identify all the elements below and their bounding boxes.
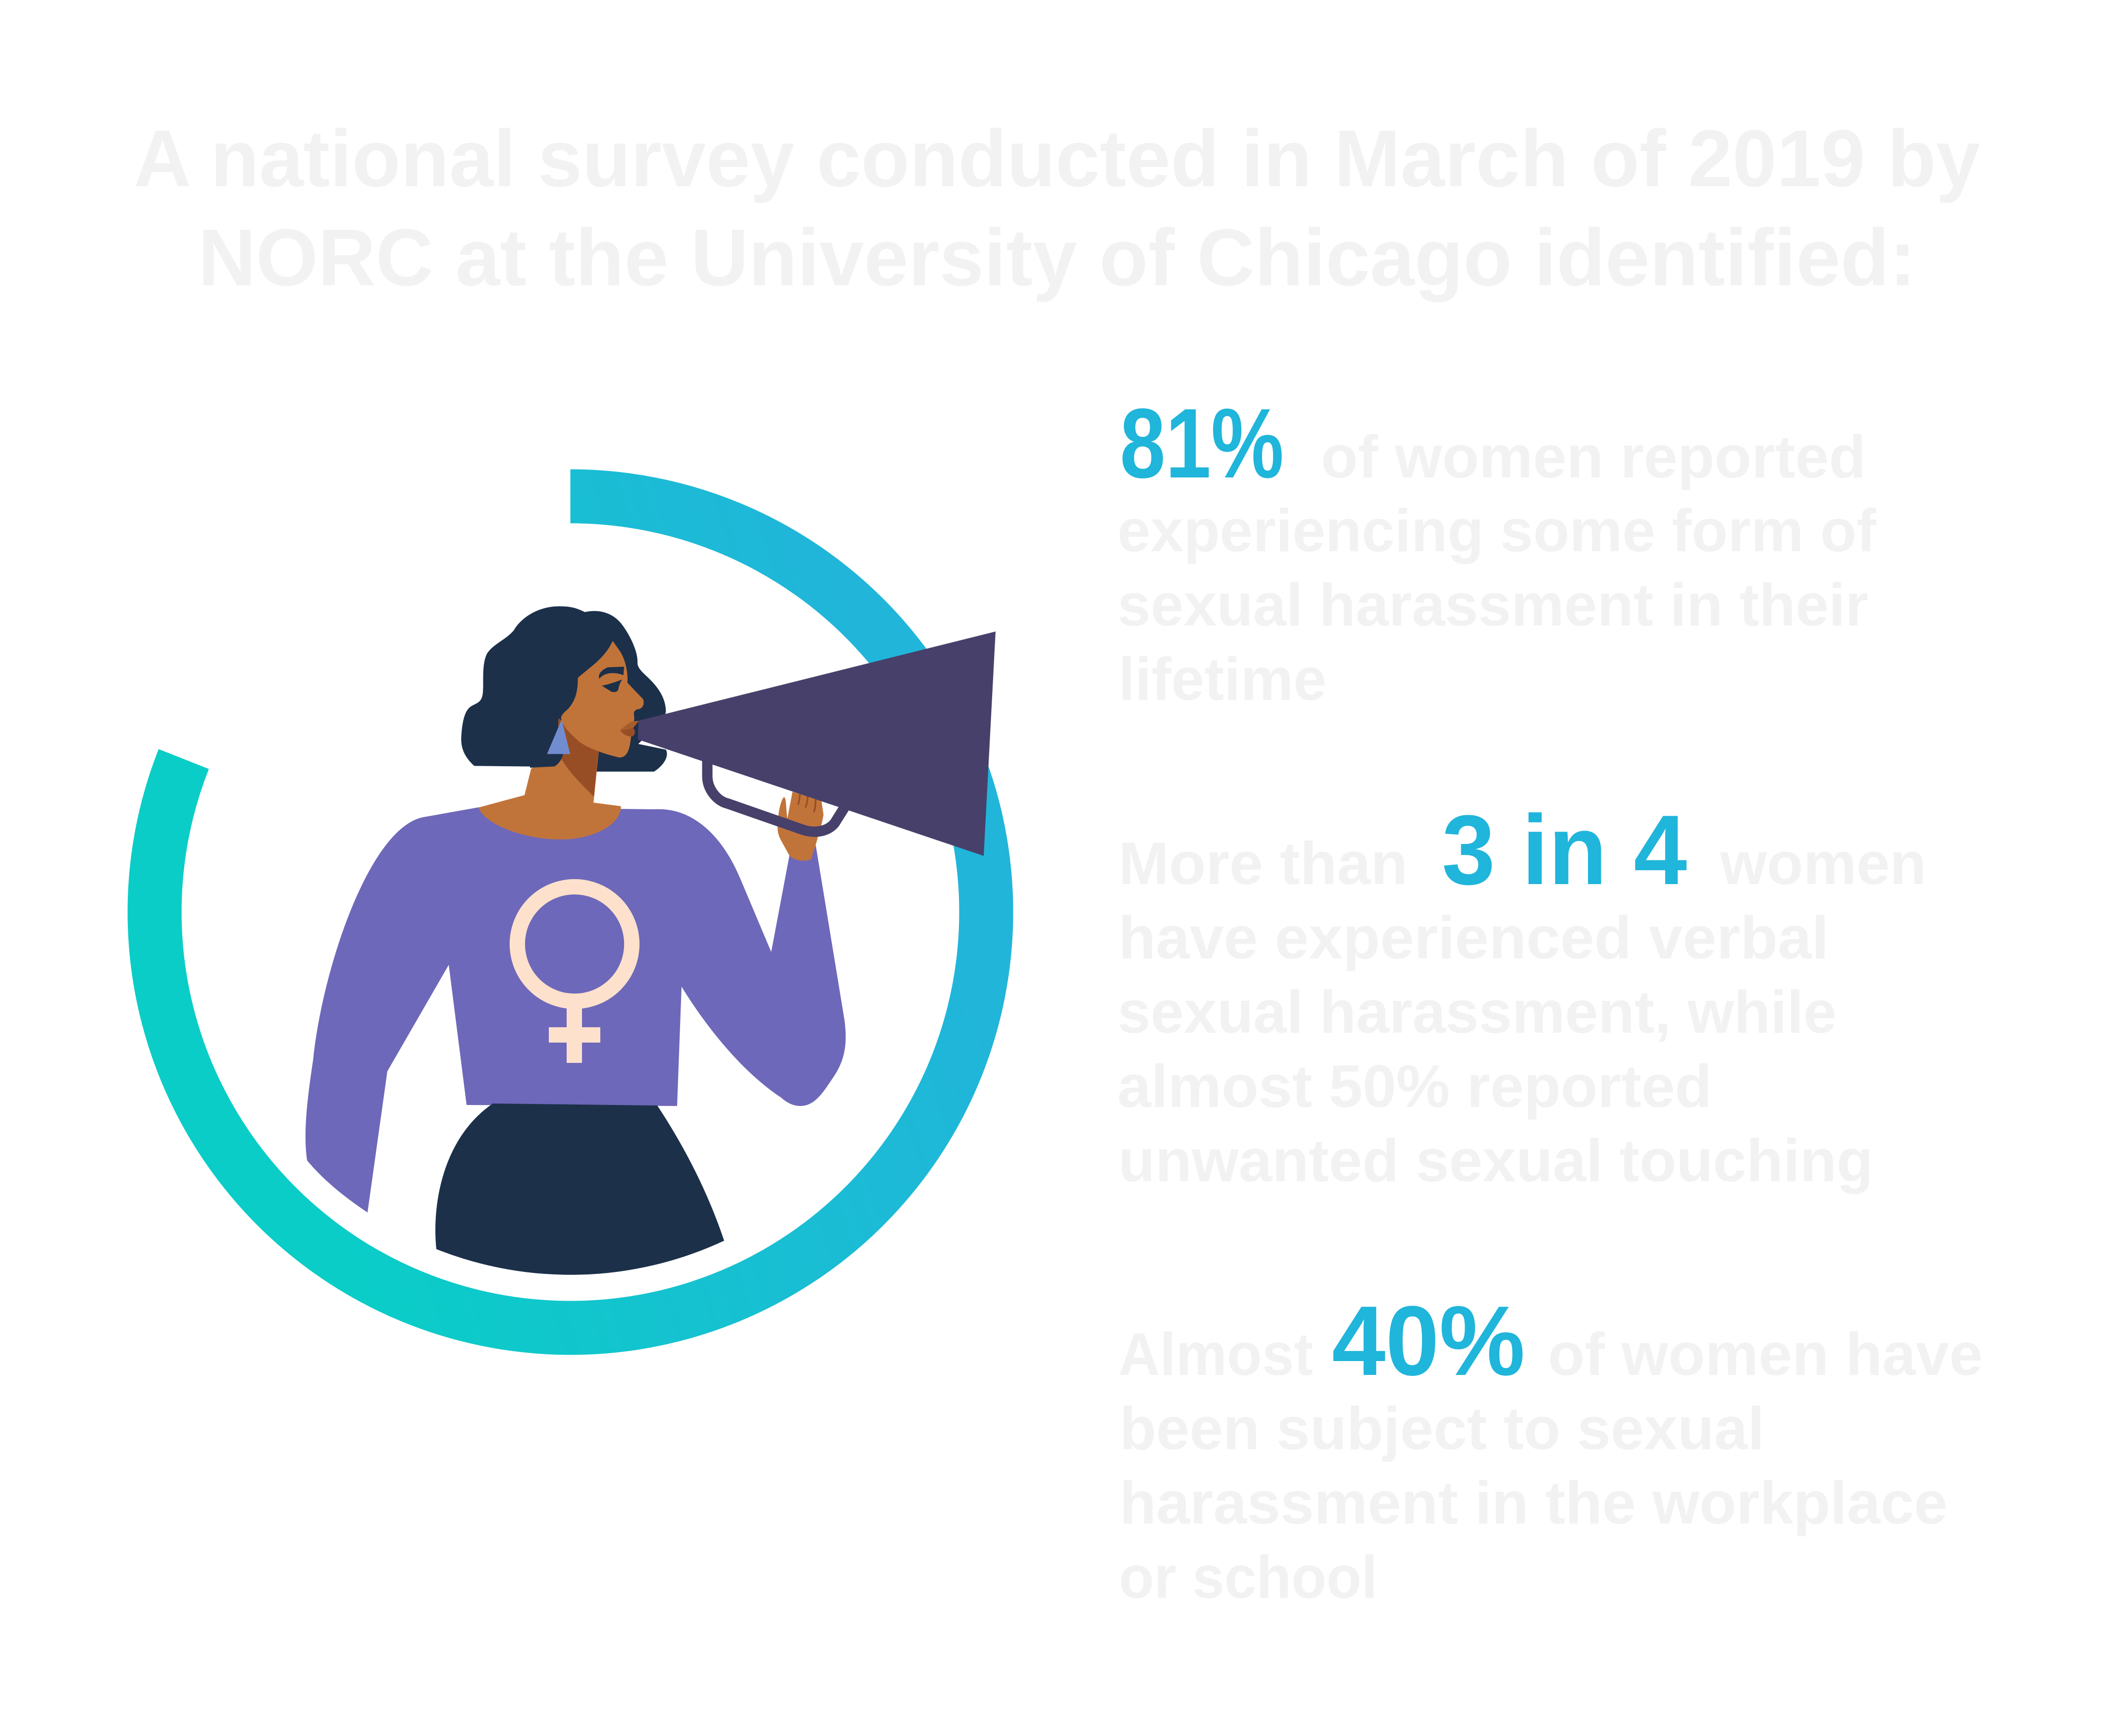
stat block: 81%: experiencing some form of xyxy=(1117,497,1876,564)
stat block: 81%: sexual harassment in their xyxy=(1117,571,1868,638)
title: A national survey conducted in March of 2019 by xyxy=(134,113,1980,204)
stat number: 81%: 81% xyxy=(1120,388,1284,499)
stat number: 3 in 4: 3 in 4 xyxy=(1442,795,1687,905)
neck and chest xyxy=(478,751,621,840)
title: NORC at the University of Chicago identified: xyxy=(198,212,1916,303)
hand xyxy=(778,791,824,861)
stat block: 3 in 4: unwanted sexual touching xyxy=(1118,1127,1873,1194)
stat block: 81% xyxy=(1117,388,1876,713)
earring xyxy=(547,720,570,754)
lower lip xyxy=(620,728,635,736)
hair lower lock over neck xyxy=(530,738,563,768)
stat block: 40%: harassment in the workplace xyxy=(1119,1469,1948,1536)
stat block: 40%: of women have xyxy=(1548,1320,1983,1388)
stat block: 3 in 4: sexual harassment, while xyxy=(1117,978,1837,1046)
stat block: 3 in 4: More than xyxy=(1118,830,1408,897)
stat block: 40%: or school xyxy=(1119,1543,1377,1611)
title xyxy=(134,113,1980,303)
stat block: 81%: lifetime xyxy=(1118,645,1326,713)
megaphone xyxy=(638,631,996,856)
stat block: 81%: of women reported xyxy=(1321,423,1866,490)
stat block: 3 in 4: women xyxy=(1720,830,1926,897)
hair xyxy=(461,606,667,772)
stat block: 40%: Almost xyxy=(1118,1320,1313,1388)
eye xyxy=(602,680,622,692)
stat block: 3 in 4 xyxy=(1117,795,1926,1194)
stat number: 40%: 40% xyxy=(1332,1286,1525,1396)
megaphone handle xyxy=(707,755,845,832)
face xyxy=(561,641,644,757)
progress ring xyxy=(155,496,986,1328)
stat block: 40% xyxy=(1118,1286,1983,1611)
stat block: 3 in 4: have experienced verbal xyxy=(1118,904,1829,971)
eyebrow xyxy=(599,667,624,679)
neck shadow xyxy=(558,718,598,796)
stat block: 40%: been subject to sexual xyxy=(1119,1395,1764,1462)
female symbol xyxy=(517,887,632,1063)
illustration: woman with megaphone xyxy=(306,606,996,1275)
skirt xyxy=(435,1104,724,1275)
upper lip xyxy=(620,721,639,730)
sweater xyxy=(306,807,846,1212)
stat block: 3 in 4: almost 50% reported xyxy=(1117,1052,1712,1120)
